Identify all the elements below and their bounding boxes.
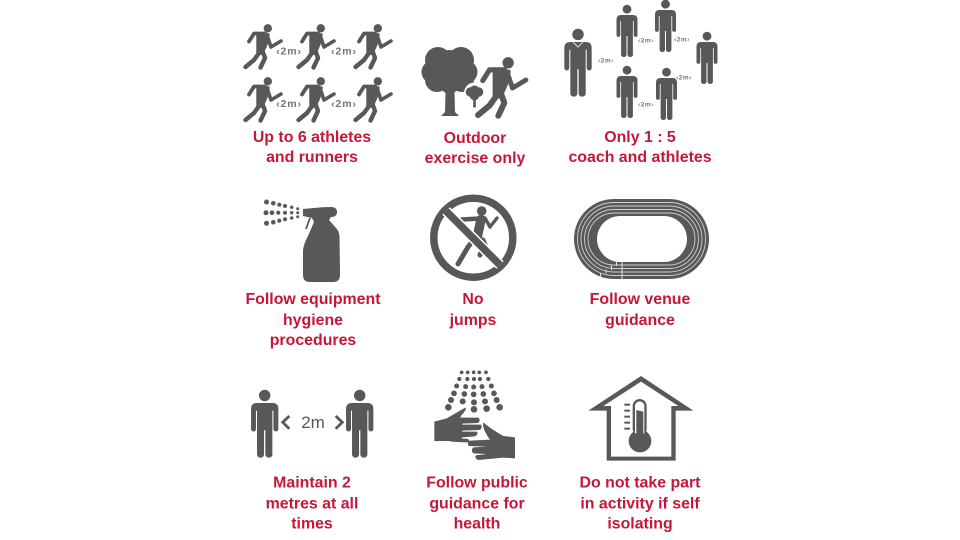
label: guidance (605, 312, 675, 329)
label: procedures (270, 332, 356, 349)
icon: six runners with 2m gaps: ‹2m› (276, 98, 302, 110)
panel: no jumps (434, 198, 513, 329)
panel: outdoor exercise (422, 47, 526, 167)
label: exercise only (425, 150, 526, 167)
label: guidance for (429, 496, 525, 512)
icon: two people 2m apart (251, 390, 373, 458)
label: health (454, 516, 500, 532)
icon: six runners with 2m gaps: ‹2m› (276, 46, 302, 58)
icon: six runners with 2m gaps: ‹2m› (331, 98, 357, 110)
label: coach and athletes (568, 149, 712, 166)
label: jumps (449, 312, 497, 329)
label: metres at all (266, 496, 358, 512)
icon: coach and five athletes: ‹2m› (676, 74, 692, 82)
icon: two people 2m apart: 2m (301, 413, 325, 432)
icon: coach and five athletes: ‹2m› (598, 58, 614, 64)
icon: trees and runner (422, 47, 526, 116)
icon: six runners with 2m gaps (246, 24, 391, 120)
label: and runners (266, 149, 358, 166)
label: isolating (607, 516, 673, 532)
icon: running track (574, 199, 709, 279)
panel: self isolating (580, 376, 701, 532)
label: in activity if self (580, 496, 700, 512)
label: times (291, 516, 333, 532)
panel: equipment hygiene (245, 200, 381, 349)
label: No (462, 291, 484, 308)
panel: coach and athletes ratio (564, 0, 718, 166)
icon: prohibited jumper (434, 198, 513, 277)
icon: coach and five athletes: ‹2m› (674, 36, 690, 44)
panel: public health guidance (426, 370, 528, 532)
label: hygiene (283, 312, 343, 329)
icon: six runners with 2m gaps: ‹2m› (331, 46, 357, 58)
icon: coach and five athletes: ‹2m› (638, 102, 654, 108)
icon: coach and five athletes: ‹2m› (638, 38, 654, 44)
label: Outdoor (444, 130, 506, 147)
icon: hand washing (434, 370, 515, 460)
panel: venue guidance (574, 199, 709, 329)
icon: house with thermometer (588, 376, 693, 461)
panel: maintain 2 metres (251, 390, 373, 532)
label: Follow equipment (245, 291, 381, 308)
panel: up to 6 athletes (246, 24, 391, 166)
icon: spray bottle (264, 200, 340, 282)
label: Do not take part (580, 474, 700, 492)
label: Up to 6 athletes (253, 129, 371, 146)
label: Follow public (426, 474, 528, 492)
label: Maintain 2 (273, 474, 351, 492)
label: Follow venue (590, 291, 690, 308)
icon: coach and five athletes (564, 0, 718, 120)
label: Only 1 : 5 (604, 129, 676, 146)
